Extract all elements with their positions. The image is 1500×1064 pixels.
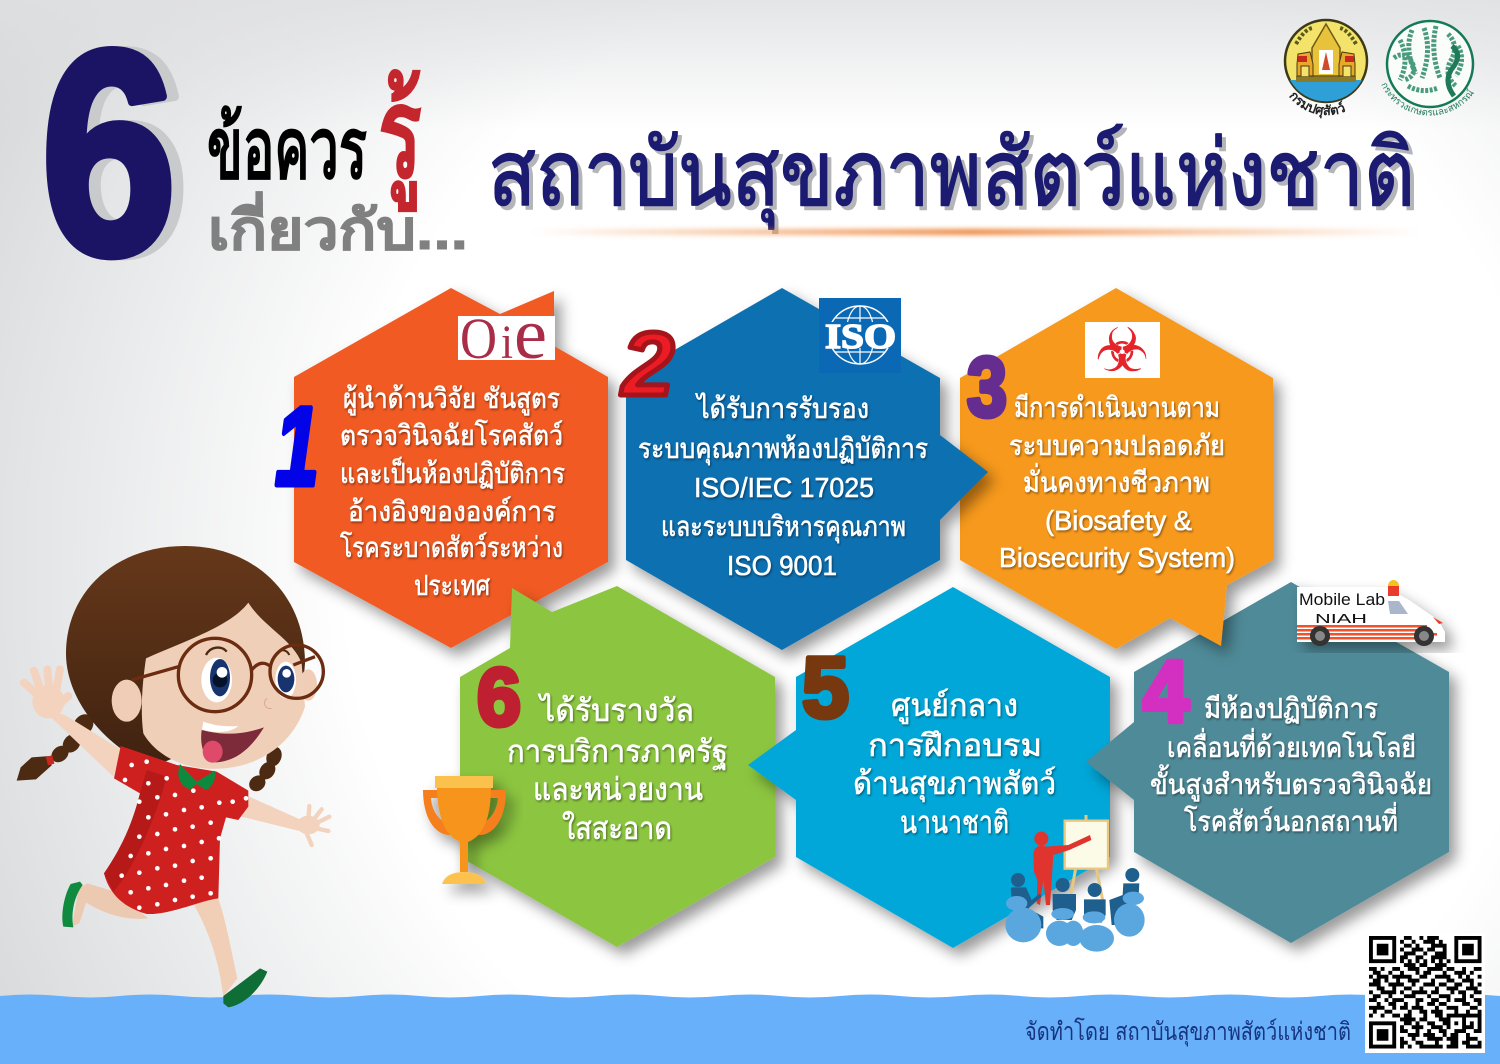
number 4: 4 [1143,642,1189,741]
logo: department of livestock development [1284,18,1368,118]
text: panel 1: ประเทศ [414,570,490,601]
panel 4: mobile laboratory [1086,580,1449,943]
text: panel 1: อ้างอิงขององค์การ [348,496,556,527]
logo: ISO [819,298,901,373]
text: panel 1: ผู้นำด้านวิจัย ชันสูตร [343,383,560,416]
logo: ministry of agriculture and cooperatives: กระทรวงเกษตรและสหกรณ์ [1382,83,1474,116]
back leg and shoe [72,883,148,927]
nose [264,698,272,709]
text: panel 2: ระบบคุณภาพห้องปฏิบัติการ [638,433,928,466]
text: panel 1: ตรวจวินิจฉัยโรคสัตว์ [340,419,563,451]
text: panel 4: ขั้นสูงสำหรับตรวจวินิจฉัย [1150,764,1432,802]
logo: OIE [458,294,555,374]
ears [112,680,142,722]
text: panel 6: และหน่วยงาน [533,772,703,807]
text: panel 3: (Biosafety & [1045,505,1192,536]
text: panel 6: ใสสะอาด [562,811,672,846]
text: panel 2: ISO/IEC 17025 [694,472,874,503]
logo: department of livestock development: กรมปศุสัตว์ [1289,92,1346,118]
text: panel 4: โรคสัตว์นอกสถานที่ [1184,802,1398,837]
number 1: 1 [275,384,319,509]
text: panel 3: มั่นคงทางชีวภาพ [1023,463,1210,498]
panel 1: disease research leader [275,288,608,648]
heading: big number 6: 6 [53,0,188,315]
left arm and hand [24,669,122,777]
text: panel 4: มีห้องปฏิบัติการ [1204,693,1378,724]
icon: trophy [423,776,506,884]
text: panel 1: โรคระบาดสัตว์ระหว่าง [340,531,563,563]
icon: mobile lab ambulance [1297,580,1445,646]
hair [66,546,305,767]
collar [178,764,215,790]
panel 2: ISO accreditation [620,288,988,650]
text: panel 6 [507,693,728,846]
logo: ministry of agriculture and cooperatives [1382,20,1474,116]
logo: OIE: i [501,316,513,369]
dress [104,746,248,914]
braids [17,710,284,795]
text: panel 5 [853,688,1056,840]
text: panel 3: ระบบความปลอดภัย [1009,430,1225,461]
text: panel 5: ศูนย์กลาง [891,688,1018,724]
number 6: 6 [477,652,521,743]
logo: ISO: ISO [825,317,896,356]
heading: 6 things to know [207,64,468,261]
text: panel 4: เคลื่อนที่ด้วยเทคโนโลยี [1167,728,1416,763]
icon: biohazard: ☣ [1095,316,1149,386]
panel 3: biosafety and biosecurity [960,288,1273,649]
logo: OIE: O [460,306,497,371]
text: panel 5: ด้านสุขภาพสัตว์ [853,766,1056,803]
polka dots [119,759,248,910]
panel 5: international training centre [748,587,1145,952]
text: panel 2: และระบบบริหารคุณภาพ [661,511,906,544]
text: panel 6: ได้รับรางวัล [537,693,694,728]
bottom water band [0,994,1500,1064]
text: panel 1 [340,383,565,601]
number 3: 3 [967,340,1007,434]
heading: 6 things to know: เกี่ยวกับ... [208,191,468,261]
text: panel 2: ได้รับการรับรอง [695,393,869,424]
text: panel 2: ISO 9001 [727,550,837,581]
text: panel 6: การบริการภาครัฐ [507,734,728,770]
text: panel 5: การฝึกอบรม [868,728,1042,763]
eyebrows [206,648,227,655]
right arm and hand [242,797,329,845]
text: panel 3: มีการดำเนินงานตาม [1014,392,1220,423]
text: panel 3: Biosecurity System) [999,542,1235,573]
heading: big number 6: 6 [41,0,176,315]
heading: 6 things to know: ข้อควร [207,100,367,197]
eyes [201,658,232,702]
panel 6: public service award [423,586,775,947]
text: panel 4 [1150,693,1432,837]
footer credit: จัดทำโดย สถาบันสุขภาพสัตว์แห่งชาติ [1025,1017,1351,1047]
text: panel 2 [638,393,928,581]
mouth [201,727,264,762]
QR code [1365,933,1485,1053]
icon: mobile lab ambulance: NIAH [1315,611,1367,626]
text: panel 5: นานาชาติ [900,805,1009,840]
number 2: 2 [620,315,674,415]
face [142,603,305,769]
heading: 6 things to know: รู้ [378,64,422,212]
text: panel 3 [999,392,1235,573]
illustration: running girl [17,546,329,1007]
number 5: 5 [802,640,849,736]
logo: OIE: e [514,294,547,374]
front leg and shoe [193,898,237,997]
glasses [132,638,323,712]
text: panel 1: และเป็นห้องปฏิบัติการ [340,456,565,489]
icon: training group [1005,815,1145,952]
icon: mobile lab ambulance: Mobile Lab [1299,590,1385,609]
